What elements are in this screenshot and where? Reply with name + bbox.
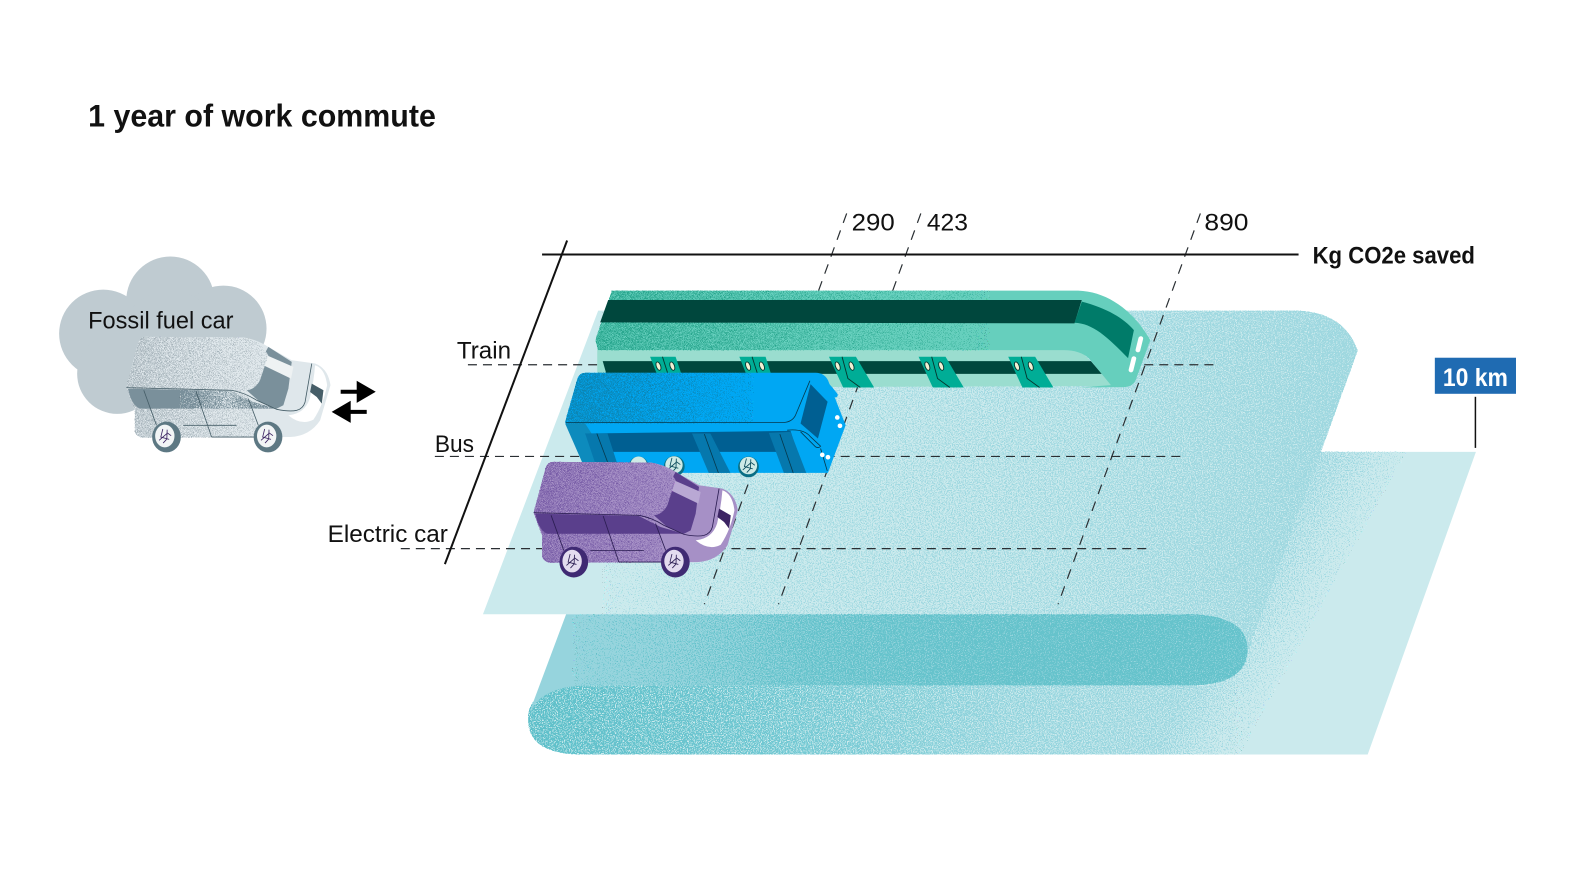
bus wheels [629, 456, 759, 477]
car windscreen [654, 472, 699, 534]
label: electric car: Electric car [328, 521, 448, 548]
train doors [650, 357, 1053, 388]
290, 423 and 890 guide lines [704, 213, 1200, 604]
car windscreen highlight [263, 355, 293, 379]
car grille [717, 509, 731, 529]
car roof stipple [534, 462, 676, 515]
value 290: 290 [852, 209, 895, 236]
car roof stipple [126, 337, 268, 390]
car windscreen highlight [671, 480, 701, 504]
value 423: 423 [927, 209, 968, 236]
car outline strokes [126, 364, 312, 437]
lower sheet stipple left [528, 685, 1262, 755]
car wheels [152, 422, 282, 452]
train [595, 291, 1150, 388]
electric car [534, 462, 738, 577]
bus mirror [819, 381, 836, 395]
train window [600, 300, 1082, 323]
car front light [696, 490, 734, 547]
bus lower-left shade [565, 423, 617, 473]
cloud [59, 257, 267, 414]
scale callout: 10 km: 10 km [1443, 364, 1508, 392]
bus side window band [585, 431, 797, 452]
train dark lower window [603, 361, 1102, 374]
lower sheet stipple fade [528, 452, 1476, 755]
fossil fuel car [126, 337, 330, 452]
label: fossil fuel car: Fossil fuel car [88, 308, 233, 335]
bus lights [820, 415, 842, 460]
car side window [535, 514, 684, 534]
car outline strokes [534, 489, 719, 562]
car side window [128, 389, 277, 409]
car lower stipple [534, 513, 667, 563]
bus outline strokes [566, 381, 827, 473]
bus body [565, 373, 846, 473]
train body [595, 291, 1150, 388]
lower sheet [528, 452, 1476, 755]
icon: two-way commute arrows [332, 381, 376, 423]
value 890: 890 [1204, 209, 1248, 236]
scale callout: 10 km [1435, 358, 1516, 448]
train headlights [1131, 338, 1141, 370]
car roof [534, 462, 676, 515]
upper sheet stipple [483, 311, 1358, 651]
bus [565, 373, 846, 477]
car grille [310, 384, 323, 404]
car windscreen [247, 347, 292, 409]
car wheels [559, 547, 690, 577]
car body [126, 337, 330, 438]
train lower interior [597, 348, 1115, 388]
bus body stipple [565, 373, 754, 423]
car body [534, 462, 738, 563]
car front light [288, 365, 327, 422]
back of the fold stipple [529, 614, 1247, 713]
axis: Kg CO2e saved [542, 254, 1299, 256]
label: train: Train [457, 338, 511, 365]
axis: transport modes [445, 240, 567, 564]
back of the fold [529, 614, 1247, 713]
title: 1 year of work commute [88, 98, 436, 133]
axis label: Kg CO2e saved [1313, 243, 1475, 270]
road sheet: rolled ribbon [483, 311, 1476, 755]
upper sheet [483, 311, 1358, 651]
bus windscreen [801, 384, 828, 439]
car side window stipple [180, 389, 277, 409]
row guide lines [401, 365, 1218, 549]
label: bus: Bus [435, 431, 474, 458]
bus pillars [585, 432, 806, 473]
car roof [126, 337, 268, 390]
car lower stipple [126, 388, 260, 438]
train body stipple [595, 291, 991, 350]
train windscreen [1075, 302, 1134, 358]
